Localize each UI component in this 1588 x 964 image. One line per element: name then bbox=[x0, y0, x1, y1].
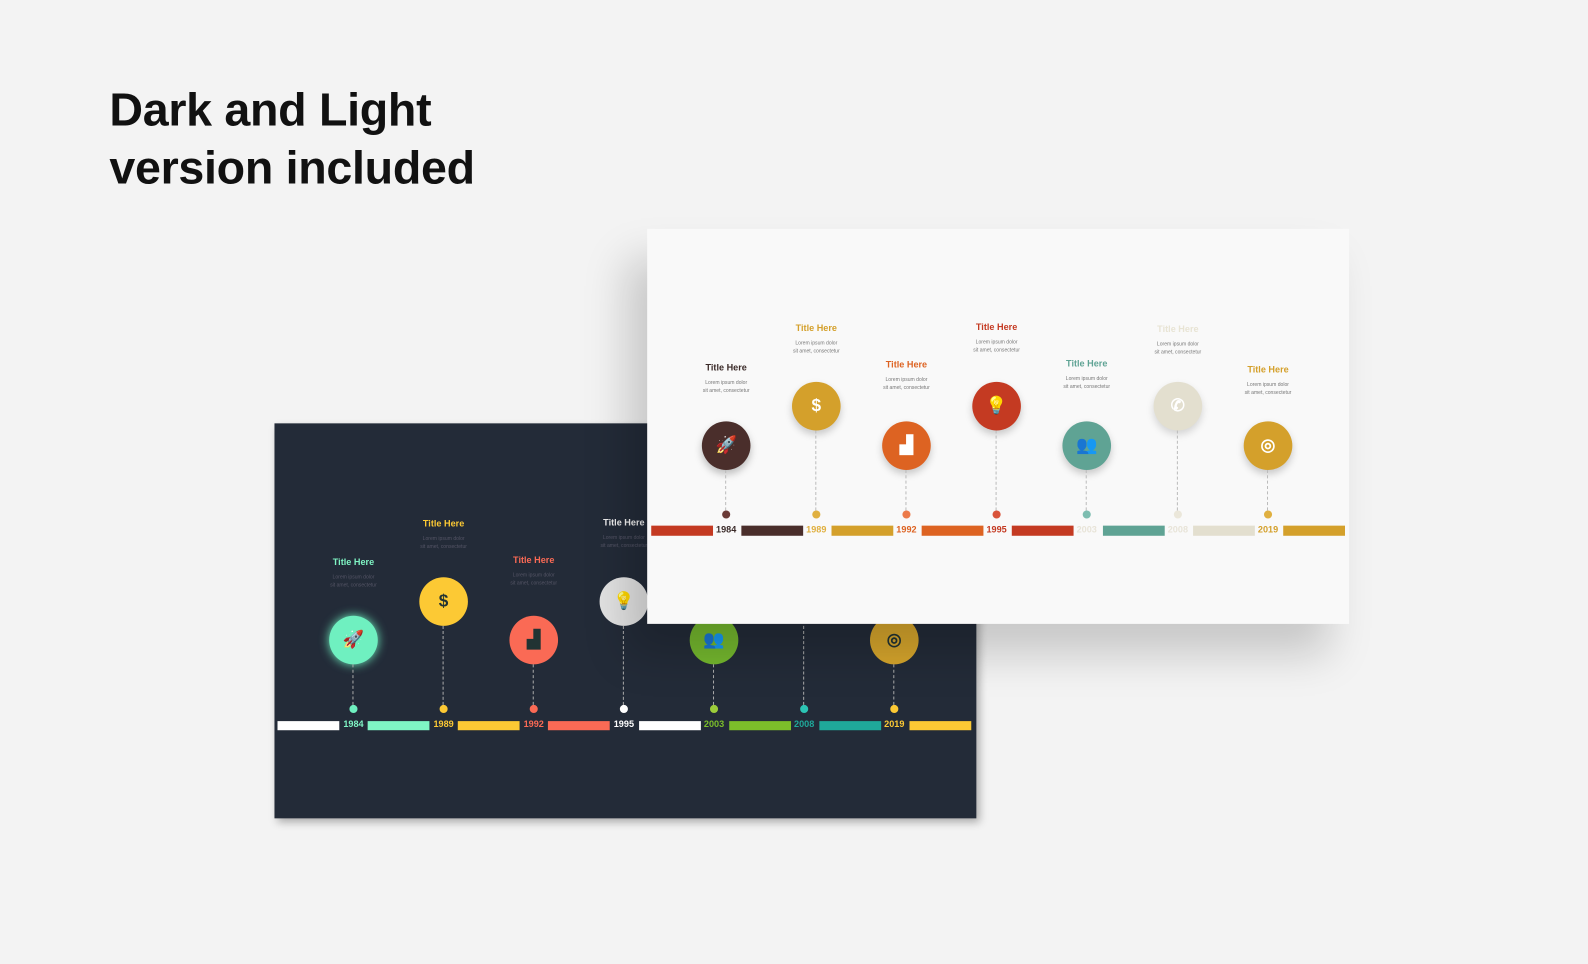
item 2003 light: Title Here bbox=[1066, 359, 1107, 369]
item 1989 light: Title Here bbox=[796, 323, 837, 333]
item 2003 dark: 2003 bbox=[704, 719, 724, 729]
item 1989 light: 1989 bbox=[806, 525, 826, 535]
item 2008 light: Lorem ipsum dolor bbox=[1157, 341, 1199, 347]
timeline bars dark bbox=[278, 721, 972, 730]
item 2003 light bbox=[1059, 359, 1114, 535]
item 2008 dark: 2008 bbox=[794, 719, 814, 729]
item 2008 dark bbox=[794, 626, 814, 729]
item 1989 light: Lorem ipsum dolor bbox=[795, 340, 837, 346]
item 2003 light: 2003 bbox=[1077, 525, 1097, 535]
item 1989 dark bbox=[419, 519, 468, 729]
item 2019 light: sit amet, consectetur bbox=[1245, 390, 1291, 396]
title: version included bbox=[109, 141, 475, 193]
item 1992 light: ▟ bbox=[900, 436, 913, 455]
item 2003 light: sit amet, consectetur bbox=[1063, 384, 1110, 390]
item 2008 light: 2008 bbox=[1168, 525, 1188, 535]
item 1992 light: Lorem ipsum dolor bbox=[885, 377, 927, 383]
item 2008 light: ✆ bbox=[1171, 396, 1185, 415]
item 1992 dark: ▟ bbox=[527, 630, 540, 649]
item 1989 dark: $ bbox=[439, 591, 448, 611]
item 1989 dark: Lorem ipsum dolor bbox=[423, 536, 465, 542]
item 1984 dark: sit amet, consectetur bbox=[330, 582, 377, 588]
item 1989 light bbox=[788, 323, 844, 535]
item 1984 light: 🚀 bbox=[715, 436, 737, 455]
item 1995 dark bbox=[600, 518, 648, 729]
item 1995 light: 💡 bbox=[986, 396, 1007, 415]
item 1989 dark: sit amet, consectetur bbox=[420, 544, 467, 550]
item 1995 dark: 💡 bbox=[613, 591, 635, 611]
item 1992 light: sit amet, consectetur bbox=[883, 385, 930, 391]
item 2019 dark bbox=[870, 624, 919, 729]
item 1989 light: $ bbox=[812, 396, 821, 415]
item 1992 light bbox=[879, 360, 934, 535]
item 1984 light: 1984 bbox=[716, 525, 736, 535]
item 2019 light: Lorem ipsum dolor bbox=[1247, 382, 1289, 388]
item 1992 dark bbox=[509, 555, 558, 729]
item 2003 dark bbox=[690, 624, 738, 729]
item 1992 dark: sit amet, consectetur bbox=[510, 580, 557, 586]
panel: light timeline bbox=[647, 229, 1349, 624]
item 2008 light: sit amet, consectetur bbox=[1155, 349, 1201, 355]
item 1995 light: Title Here bbox=[976, 322, 1017, 332]
item 2003 light: Lorem ipsum dolor bbox=[1066, 376, 1108, 382]
item 1992 dark: Title Here bbox=[513, 555, 554, 565]
item 1992 dark: 1992 bbox=[524, 719, 544, 729]
item 1992 dark: Lorem ipsum dolor bbox=[513, 572, 555, 578]
item 1995 light: 1995 bbox=[986, 525, 1007, 535]
item 1995 dark: sit amet, consectetur bbox=[601, 543, 647, 549]
item 1984 light: Lorem ipsum dolor bbox=[705, 380, 747, 386]
item 1984 dark: Title Here bbox=[333, 557, 374, 567]
item 1995 light bbox=[969, 322, 1024, 535]
title: Dark and Light bbox=[109, 83, 431, 136]
item 1995 dark: Lorem ipsum dolor bbox=[603, 535, 645, 541]
panel: dark timeline bbox=[274, 423, 976, 818]
item 2019 dark: ◎ bbox=[887, 630, 902, 649]
item 1984 light: sit amet, consectetur bbox=[703, 388, 750, 394]
item 2019 light: ◎ bbox=[1261, 436, 1276, 455]
item 2019 light: 2019 bbox=[1258, 525, 1278, 535]
item 1984 light: Title Here bbox=[705, 363, 747, 373]
item 1995 light: Lorem ipsum dolor bbox=[976, 339, 1018, 345]
item 1984 light bbox=[698, 363, 754, 535]
timeline bars light bbox=[651, 526, 1345, 536]
item 1995 light: sit amet, consectetur bbox=[973, 347, 1020, 353]
item 1995 dark: Title Here bbox=[603, 518, 645, 528]
title bbox=[109, 83, 475, 193]
item 2019 dark: 2019 bbox=[884, 719, 904, 729]
item 2003 light: 👥 bbox=[1076, 436, 1097, 455]
item 1989 dark: Title Here bbox=[423, 519, 464, 529]
item 1992 light: Title Here bbox=[886, 360, 927, 370]
item 2019 light bbox=[1240, 365, 1296, 535]
item 1984 dark: 1984 bbox=[343, 719, 364, 729]
item 1984 dark: Lorem ipsum dolor bbox=[332, 574, 374, 580]
item 1984 dark bbox=[322, 557, 386, 729]
item 2008 light: Title Here bbox=[1157, 324, 1199, 334]
item 1984 dark: 🚀 bbox=[343, 630, 364, 649]
item 1989 dark: 1989 bbox=[433, 719, 454, 729]
item 1995 dark: 1995 bbox=[614, 719, 634, 729]
item 1992 light: 1992 bbox=[896, 525, 917, 535]
item 2003 dark: 👥 bbox=[703, 630, 725, 649]
item 2008 light bbox=[1151, 324, 1204, 535]
item 2019 light: Title Here bbox=[1247, 365, 1289, 375]
item 1989 light: sit amet, consectetur bbox=[793, 348, 840, 354]
